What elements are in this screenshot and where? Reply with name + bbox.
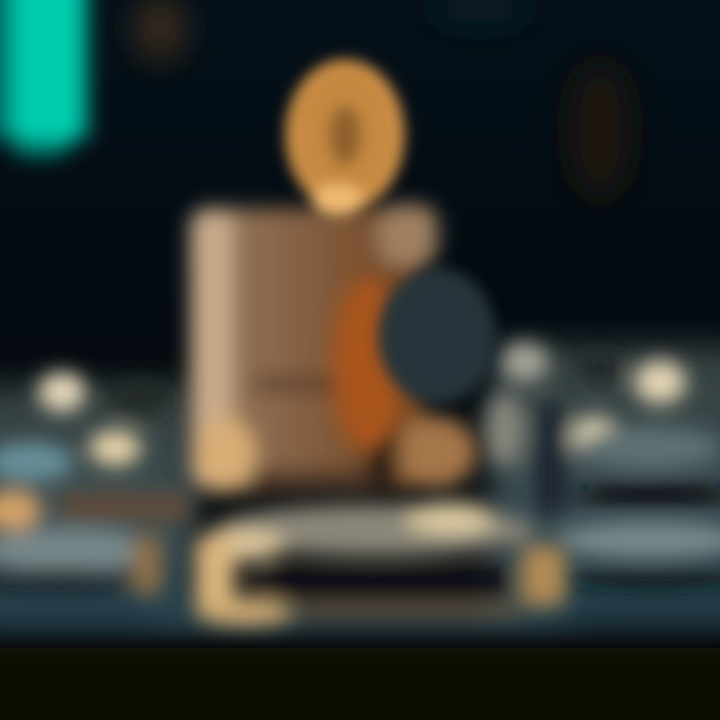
teal light bar	[0, 0, 90, 158]
right coin pile	[485, 342, 720, 587]
orange crescent beside dark coin	[332, 277, 404, 453]
dark table edge	[0, 648, 720, 720]
table surface	[0, 345, 720, 635]
central coin stack	[190, 204, 477, 494]
dark foreground coin	[378, 268, 496, 404]
front coin stack	[195, 502, 566, 626]
background bokeh lights	[134, 0, 632, 200]
floating gold coin	[285, 59, 405, 216]
left coin pile	[0, 372, 190, 595]
